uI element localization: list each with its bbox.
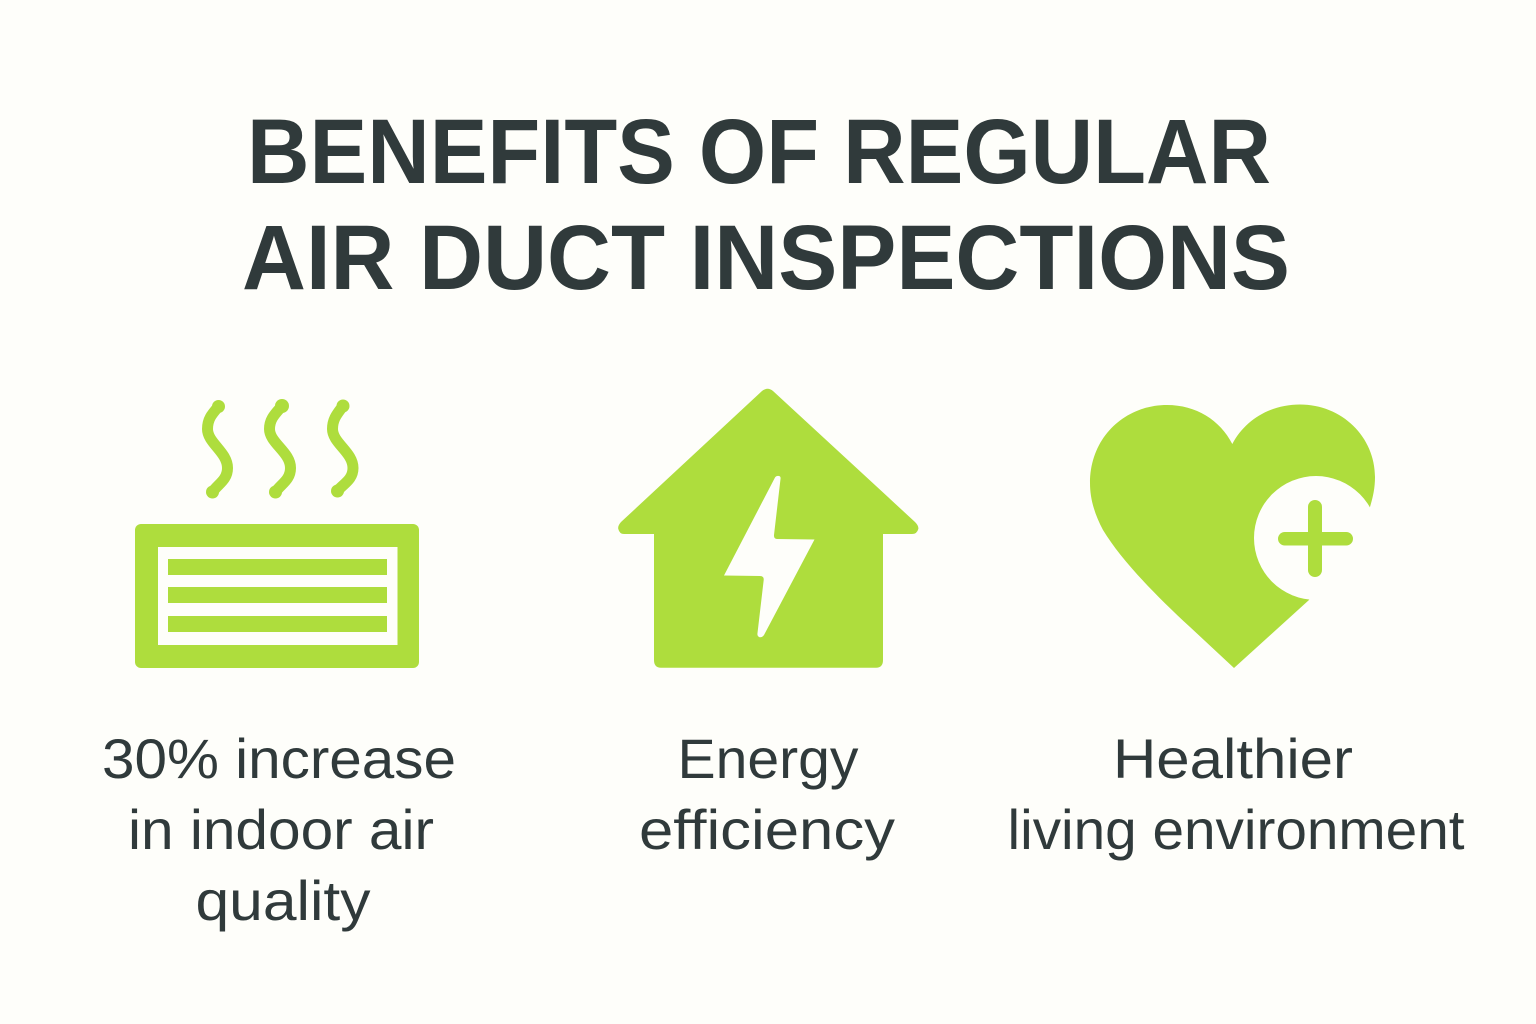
label: air quality: in indoor air <box>128 798 434 861</box>
icon: heart with plus <box>1090 404 1378 668</box>
icon: air vent with rising air <box>135 399 419 668</box>
label: healthier living: Healthier <box>1113 727 1353 790</box>
label: energy efficiency: Energy <box>678 727 858 790</box>
label: energy efficiency: efficiency <box>639 798 895 861</box>
label: energy efficiency <box>639 727 895 861</box>
icon: lightning bolt <box>724 476 814 637</box>
title: AIR DUCT INSPECTIONS <box>242 207 1290 309</box>
icon: house with lightning bolt <box>618 389 918 668</box>
label: healthier living: living environment <box>1008 798 1465 861</box>
label: air quality: 30% increase <box>102 727 456 790</box>
label: healthier living <box>1008 727 1465 861</box>
title <box>242 101 1290 309</box>
label: air quality: quality <box>196 869 370 932</box>
label: air quality <box>102 727 456 932</box>
title: BENEFITS OF REGULAR <box>247 101 1271 203</box>
